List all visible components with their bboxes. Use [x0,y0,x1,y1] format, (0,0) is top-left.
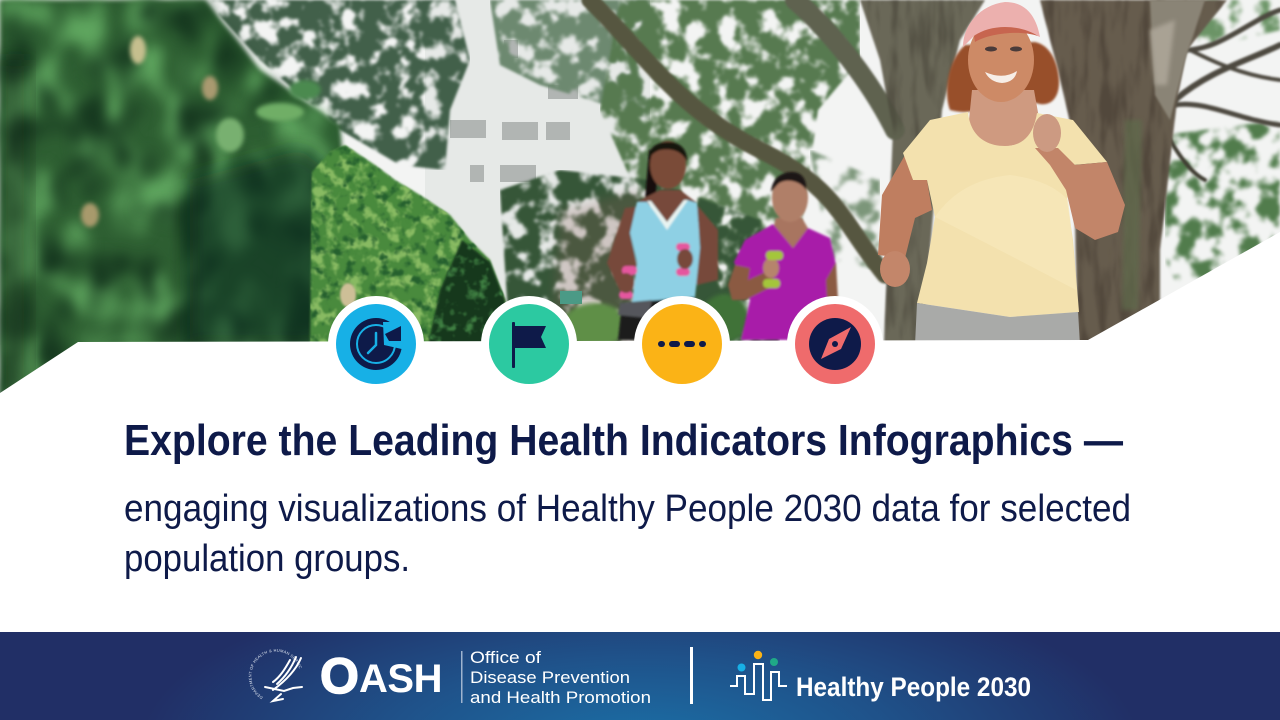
woman in blue tank top [607,141,718,340]
blue tank top [630,200,700,303]
ODPHP name [470,648,651,707]
sharp green bush [310,145,510,345]
woman in magenta shirt [728,172,838,340]
icon: clock with circular arrow [328,296,424,392]
face [968,18,1034,102]
left arm [878,155,932,258]
lime dumbbell [763,251,783,288]
logo: HHS seal: DEPARTMENT OF HEALTH & HUMAN SERVICES USA [248,649,302,700]
hair [947,42,1059,112]
white vertical divider [690,647,693,704]
tree trunks and branches [590,0,1280,345]
title: Explore the Leading Health Indicators Infographics — [124,416,1123,465]
logo: OASH: ASH [359,657,442,701]
background trees [205,0,1280,345]
sky background [0,0,1280,345]
neck and chest [968,90,1042,149]
subtitle text: population groups. [124,538,410,580]
background building [425,0,650,300]
subtitle text [124,488,1131,580]
right arm [1035,148,1125,240]
large tree trunk right [1040,0,1227,345]
yellow t-shirt [903,112,1107,317]
icon: dashes [634,296,730,392]
Healthy People 2030 wordmark: Healthy People 2030 [796,672,1031,702]
ODPHP name: Office of [470,648,541,667]
neck and arms [607,190,718,295]
pink cap [963,2,1040,47]
ODPHP name: and Health Promotion [470,688,651,707]
pink dumbbells [619,243,690,299]
icon: flag [481,296,577,392]
divider [461,651,462,703]
bush behind women [563,294,749,347]
magenta shirt [734,224,836,340]
ponytail [645,150,660,202]
ODPHP name: Disease Prevention [470,668,630,687]
photo: three women jogging in a park [0,0,1280,400]
grey pants [915,303,1080,345]
white content panel [0,232,1280,632]
subtitle text: engaging visualizations of Healthy People 2030 data for selected [124,488,1131,530]
icon: compass [787,296,883,392]
pants [618,297,700,340]
left foreground hedge, blurred [0,0,345,400]
logo: HHS seal [248,649,303,703]
logo: OASH: O [320,648,359,704]
woman in front with pink cap [878,2,1125,345]
logo: Healthy People mark [730,651,787,700]
